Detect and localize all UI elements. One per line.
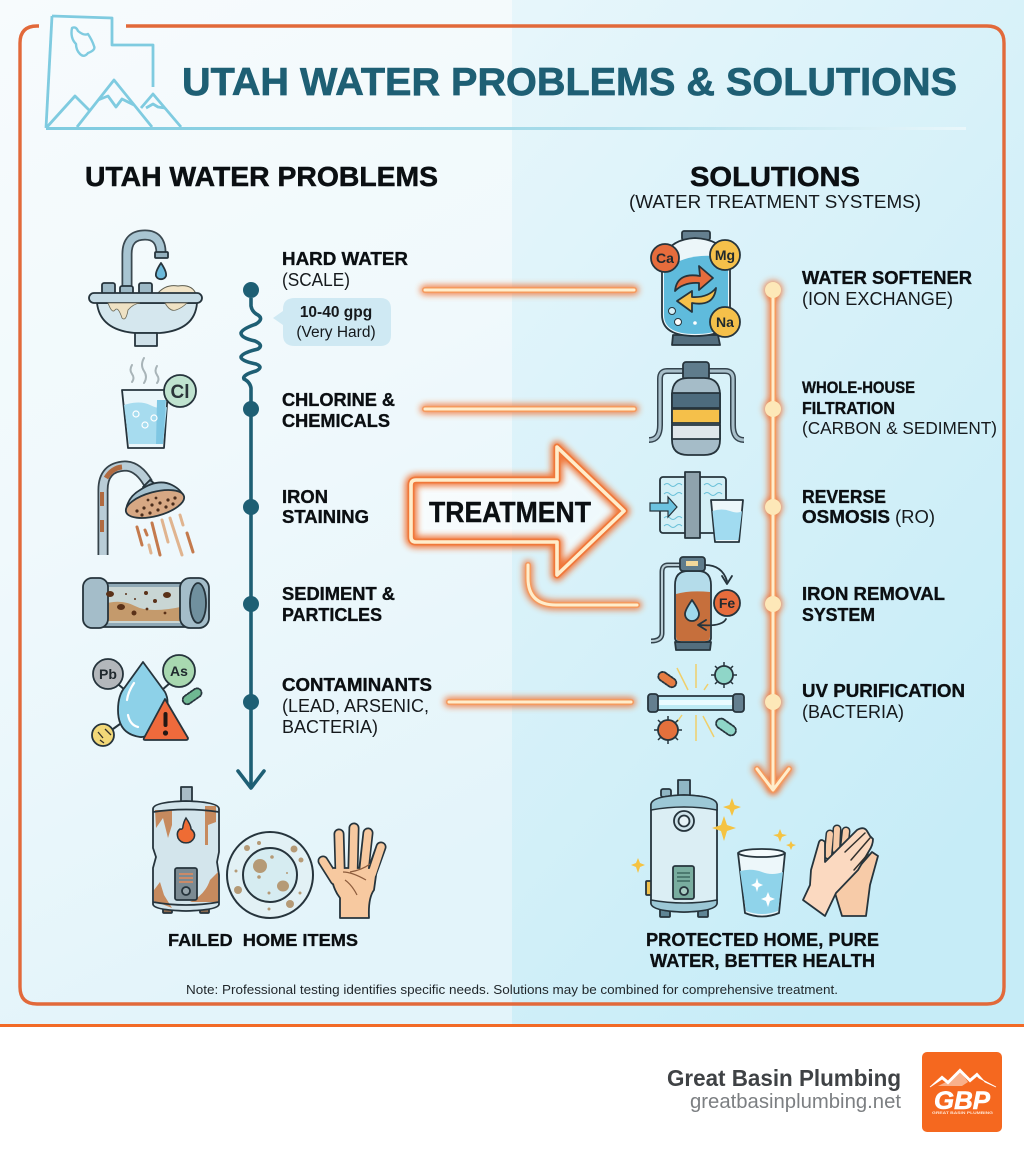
label: filtration: FILTRATION — [802, 398, 895, 418]
label: iron — [282, 487, 369, 527]
footer rule — [0, 1024, 1024, 1027]
logo: GBP — [934, 1087, 990, 1115]
label: iron removal: IRON REMOVAL — [802, 584, 945, 604]
label: iron removal: SYSTEM — [802, 605, 875, 625]
label: reverse osmosis: REVERSE — [802, 487, 886, 507]
footer band — [0, 1027, 1024, 1154]
icon: failed water heater — [153, 787, 219, 913]
problems timeline — [238, 282, 264, 788]
label: iron removal — [802, 584, 945, 625]
icon: contaminants in water: As — [170, 663, 188, 679]
icon: clean water heater — [646, 780, 717, 917]
label: water softener: WATER SOFTENER — [802, 268, 972, 288]
label: chlorine: CHLORINE & — [282, 390, 395, 410]
arrow label: TREATMENT — [429, 497, 591, 529]
callout: hardness: (Very Hard) — [296, 324, 376, 341]
heading: solutions: (WATER TREATMENT SYSTEMS) — [629, 191, 921, 212]
callout: hardness: 10-40 gpg — [300, 304, 372, 321]
caption: protected home — [646, 929, 879, 971]
icon: water softener tank: Mg — [715, 247, 735, 263]
icon: contaminants in water — [92, 655, 203, 746]
label: sediment — [282, 584, 395, 625]
label: filtration: (CARBON & SEDIMENT) — [802, 418, 997, 438]
icon: spotted plate — [227, 832, 313, 918]
icon: rusty shower — [102, 466, 193, 555]
label: hard water: (SCALE) — [282, 270, 350, 290]
icon: pipe with sediment — [83, 578, 209, 628]
caption: protected home: WATER, BETTER HEALTH — [650, 950, 875, 971]
footer brand text: Great Basin Plumbing — [667, 1065, 901, 1091]
icon: whole-house filter — [649, 362, 744, 455]
icon: sparkles — [631, 798, 796, 873]
callout: hardness — [273, 298, 391, 346]
connector: hard water to softener — [425, 285, 634, 295]
connector: contaminants to UV — [449, 697, 631, 707]
icon: clean hands — [803, 828, 878, 916]
label: reverse osmosis: (RO) — [895, 507, 935, 527]
footer brand text — [667, 1065, 901, 1113]
label: water softener — [802, 268, 972, 309]
icon: Utah outline with mountains — [46, 16, 181, 128]
heading: problems: UTAH WATER PROBLEMS — [85, 161, 438, 192]
label: contaminants: CONTAMINANTS — [282, 675, 432, 695]
label: reverse osmosis — [802, 487, 935, 527]
label: contaminants — [282, 675, 432, 737]
label: iron: STAINING — [282, 507, 369, 527]
background: problems side — [0, 0, 512, 1024]
title underline — [46, 127, 966, 130]
icon: scaled sink — [89, 235, 202, 346]
title: UTAH WATER PROBLEMS & SOLUTIONS — [182, 61, 957, 104]
label: reverse osmosis: OSMOSIS — [802, 507, 890, 527]
connector: iron removal hook — [528, 565, 637, 605]
icon: iron removal: Fe — [719, 595, 735, 611]
caption: protected home: PROTECTED HOME, PURE — [646, 929, 879, 950]
icon: water softener tank: Na — [716, 314, 734, 330]
connector: chlorine to filtration — [425, 404, 634, 414]
icon: reverse osmosis — [650, 472, 743, 542]
note: Note: Professional testing identifies specific needs. Solutions may be combined for comprehensive treatment. — [186, 982, 838, 997]
treatment arrow — [411, 447, 624, 575]
label: filtration — [802, 378, 997, 438]
caption: failed items: FAILED HOME ITEMS — [168, 930, 358, 950]
label: chlorine: CHEMICALS — [282, 411, 390, 431]
icon: contaminants in water: Pb — [99, 666, 117, 682]
label: contaminants: (LEAD, ARSENIC, — [282, 696, 429, 716]
logo — [922, 1052, 1002, 1132]
heading: solutions: SOLUTIONS — [690, 161, 860, 192]
label: sediment: SEDIMENT & — [282, 584, 395, 604]
label: contaminants: BACTERIA) — [282, 717, 378, 737]
icon: clean glass — [738, 849, 785, 916]
label: sediment: PARTICLES — [282, 605, 382, 625]
label: chlorine — [282, 390, 395, 431]
label: iron: IRON — [282, 487, 328, 507]
icon: iron removal — [651, 557, 740, 650]
background: solutions side — [512, 0, 1024, 1024]
label: hard water — [282, 249, 408, 290]
icon: glass with chlorine: Cl — [170, 382, 190, 403]
icon: water softener tank — [651, 231, 740, 345]
solutions timeline — [757, 280, 789, 790]
label: UV: (BACTERIA) — [802, 702, 904, 722]
icon: dry hand — [323, 828, 381, 918]
icon: water softener tank: Ca — [656, 250, 674, 266]
logo: GREAT BASIN PLUMBING — [932, 1110, 993, 1115]
label: filtration: WHOLE-HOUSE — [802, 378, 915, 397]
icon: glass with chlorine — [122, 358, 196, 448]
label: UV — [802, 681, 965, 722]
icon: UV purification — [648, 662, 744, 744]
label: UV: UV PURIFICATION — [802, 681, 965, 701]
label: hard water: HARD WATER — [282, 249, 408, 269]
label: water softener: (ION EXCHANGE) — [802, 289, 953, 309]
heading: solutions — [629, 161, 921, 212]
footer brand text: greatbasinplumbing.net — [690, 1091, 901, 1113]
